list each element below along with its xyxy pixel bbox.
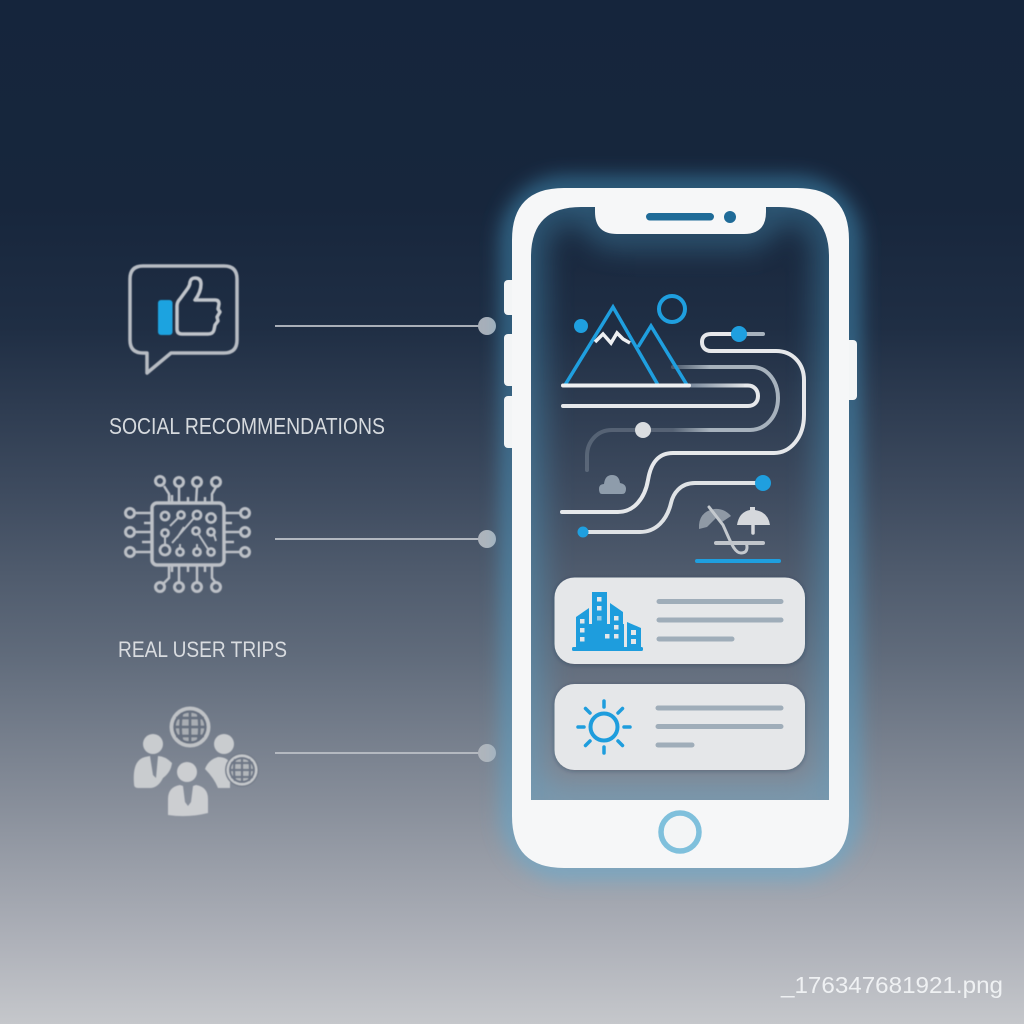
mountains [565,307,687,385]
label: social recommendations: SOCIAL RECOMMENDATIONS [109,413,385,439]
icon: global community [134,706,259,816]
person centre [168,762,208,816]
text placeholder lines [658,708,781,745]
chip body [152,503,224,565]
speech bubble outline [130,266,237,373]
home button [661,813,699,851]
route marker start [578,526,588,538]
umbrella pole [751,525,755,533]
cloud [599,475,626,494]
grey route upper [587,367,778,470]
blue ground line [697,559,779,563]
person left [134,734,172,788]
snow caps [595,333,630,343]
screen inner glow [531,207,829,800]
icon: city buildings [572,592,643,651]
parasol pole and wave [709,507,747,553]
thumb outline [177,278,220,334]
lower route [583,483,763,532]
folded road lower part [563,386,758,406]
tilted parasol [699,509,731,529]
folded road upper fading part [689,384,746,388]
text placeholder lines [659,602,781,639]
beach bar [716,541,763,545]
card background [554,684,805,770]
camera [724,211,736,223]
person right [205,734,234,788]
route tail [739,332,763,336]
beach umbrella [737,507,770,525]
illustration: mountain and route map [562,296,804,561]
label: real user trips: REAL USER TRIPS [118,637,287,662]
long white route [562,334,804,512]
blue thumb cuff [158,300,172,335]
phone body [512,188,849,868]
large globe [170,706,210,748]
horizon line [563,384,689,388]
blue dot [574,319,588,333]
connector: global users [275,744,496,762]
pin terminals [126,476,250,592]
watermark filename: _176347681921.png [780,972,1003,998]
side buttons [504,280,857,448]
route marker grey [635,422,651,438]
phone [504,188,857,868]
chip pins [136,486,240,583]
route marker end [755,475,771,491]
card background [554,578,805,664]
connector: real user trips [275,530,496,548]
icon: sun [578,701,630,753]
sun ring [659,296,685,322]
card: city [554,578,805,664]
icon: thumbs up speech bubble [130,266,237,373]
inner circuit [160,511,216,556]
icon: ai chip [126,476,250,592]
speaker [646,213,714,220]
beach scene [697,507,779,561]
route marker blue [731,326,747,342]
small globe [225,753,259,787]
outer glow [512,188,849,868]
card: weather [554,684,805,770]
connector: social recommendations [275,317,496,335]
